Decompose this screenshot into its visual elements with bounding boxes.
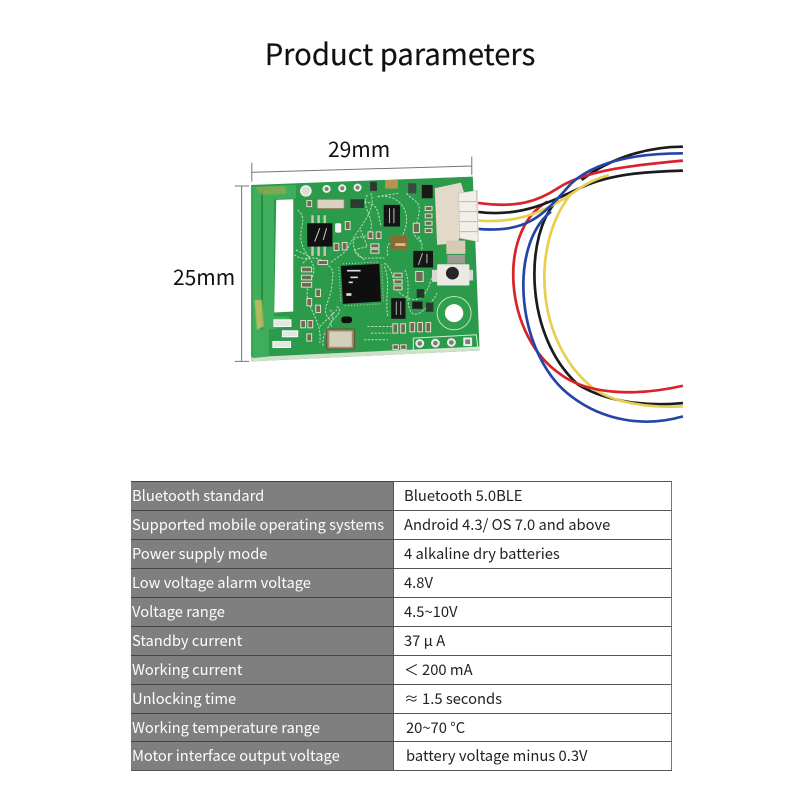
row: Unlocking time (131, 684, 672, 713)
row: Bluetooth standard (131, 481, 672, 510)
dimension line: width (252, 157, 472, 182)
row: Power supply mode: 4 alkaline dry batteries (404, 543, 560, 564)
antenna slot (274, 199, 293, 312)
row: Standby current: Standby current (132, 630, 242, 651)
capacitors (385, 180, 398, 189)
push button (432, 270, 440, 282)
row: Supported mobile operating systems: Android 4.3/ OS 7.0 and above (404, 514, 610, 535)
row: Working temperature range (131, 713, 672, 741)
secondary chip upper left (311, 215, 326, 256)
row: Supported mobile operating systems (131, 510, 672, 539)
row: Low voltage alarm voltage: 4.8V (404, 572, 433, 593)
bottom crystal (327, 329, 354, 349)
row: Voltage range (131, 597, 672, 626)
through holes (324, 185, 471, 347)
row: Power supply mode: Power supply mode (132, 543, 267, 564)
row: Motor interface output voltage (131, 741, 672, 770)
mounting hole (437, 296, 471, 330)
row: Motor interface output voltage: battery voltage minus 0.3V (406, 745, 588, 766)
row: Working current: ＜ 200 mA (404, 659, 473, 680)
circuit board (251, 177, 480, 361)
row: Standby current (131, 626, 672, 655)
row: Working temperature range: Working temperature range (132, 716, 320, 738)
antenna strip (252, 185, 296, 358)
row: Unlocking time: Unlocking time (132, 688, 236, 709)
chips small (384, 205, 400, 227)
parameter table (131, 481, 672, 771)
row: Voltage range: Voltage range (132, 601, 225, 622)
row: Bluetooth standard: Bluetooth standard (132, 485, 264, 506)
white connector (435, 183, 479, 245)
row: Bluetooth standard: Bluetooth 5.0BLE (404, 485, 522, 506)
row: Unlocking time: ≈ 1.5 seconds (404, 688, 502, 709)
row: Working current: Working current (132, 659, 242, 680)
row: Low voltage alarm voltage (131, 568, 672, 597)
row: Standby current: 37 μ A (404, 630, 445, 651)
title: Product parameters (265, 32, 535, 74)
product photo: circuit board with wires (234, 145, 684, 423)
pads (273, 320, 298, 347)
wires (478, 147, 683, 422)
small resistors (301, 201, 432, 349)
row: Motor interface output voltage: Motor interface output voltage (132, 745, 340, 766)
dimension line: height (235, 186, 249, 361)
main chip (341, 264, 381, 304)
trace texture (294, 193, 437, 346)
crystal top (317, 199, 344, 209)
label: width 29mm: 29mm (328, 134, 390, 164)
row: Low voltage alarm voltage: Low voltage alarm voltage (132, 572, 311, 593)
row: Supported mobile operating systems: Supported mobile operating systems (132, 514, 384, 535)
row: Voltage range: 4.5~10V (404, 601, 458, 622)
row: Working current (131, 655, 672, 684)
row: Working temperature range: 20~70 °C (406, 716, 465, 738)
row: Power supply mode (131, 539, 672, 568)
label: height 25mm: 25mm (173, 262, 235, 292)
